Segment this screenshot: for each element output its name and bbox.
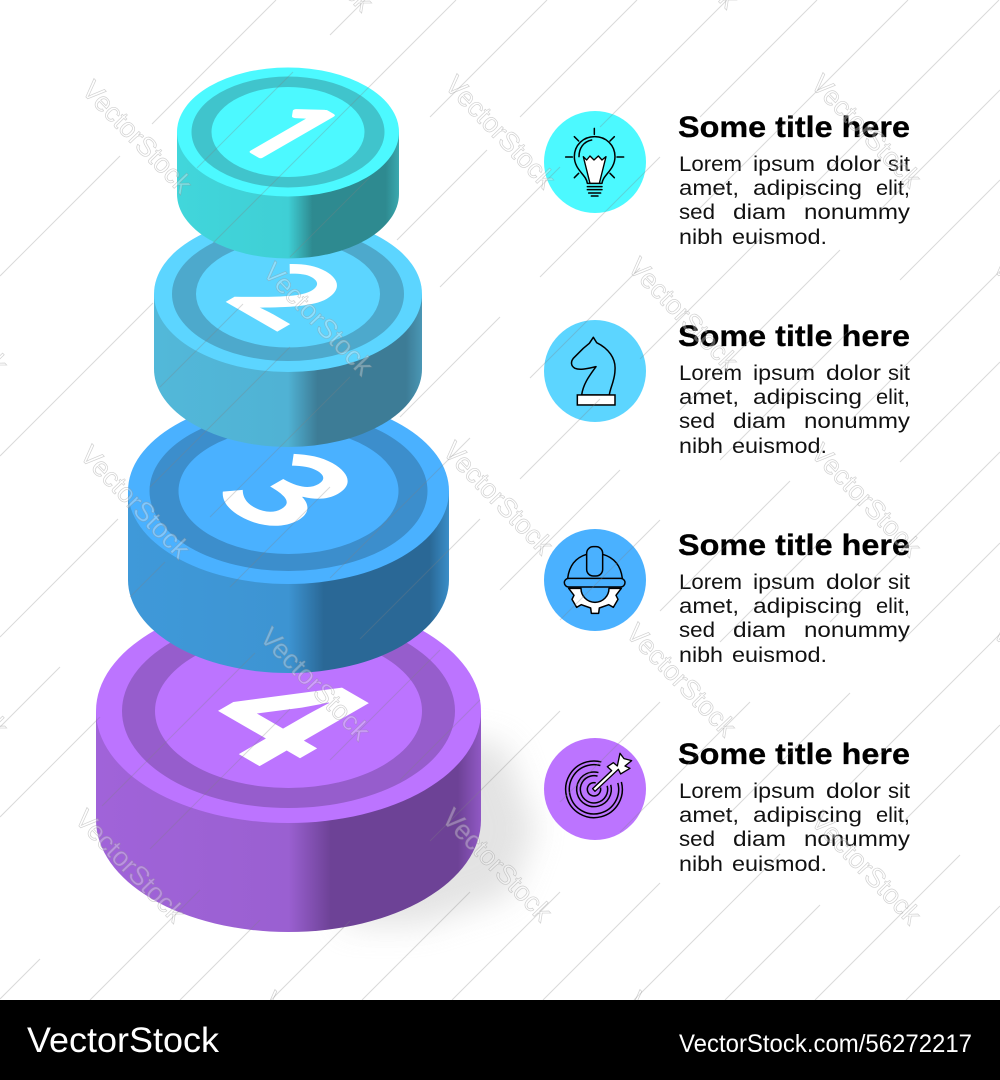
text block 3: nonummy xyxy=(804,619,911,642)
text block 1: diam xyxy=(733,201,786,224)
number 3: 3 xyxy=(173,414,424,558)
text block 4: nibh xyxy=(679,853,723,876)
text block 1: adipiscing xyxy=(753,177,862,200)
disc 3 blue xyxy=(128,398,449,673)
watermarks: VectorStock xyxy=(805,69,927,194)
text block 2: sit xyxy=(888,362,910,385)
watermarks: VectorStock xyxy=(69,804,191,929)
text block 4: euismod. xyxy=(732,853,827,876)
number 4: 4 xyxy=(144,624,452,802)
icon: target and arrow xyxy=(544,738,646,840)
text block 3: elit, xyxy=(876,595,910,618)
text block 4: dolor xyxy=(826,780,881,803)
text block 3: sed xyxy=(679,619,715,642)
text block 2 xyxy=(678,320,911,458)
watermarks: VectorStock xyxy=(805,806,927,931)
watermarks: VectorStock xyxy=(74,440,196,565)
text block 1 xyxy=(678,111,911,249)
drop shadow of stack xyxy=(340,735,535,925)
number 1: 1 xyxy=(209,90,364,179)
text block 2: elit, xyxy=(876,386,910,409)
text block 4: Lorem xyxy=(679,780,742,803)
text block 1: ipsum xyxy=(753,153,815,176)
heading 4: Some title here xyxy=(678,738,910,771)
text block 3: adipiscing xyxy=(753,595,862,618)
footer bar xyxy=(0,1000,1000,1080)
footer brand: VectorStock xyxy=(27,1020,219,1060)
watermarks: VectorStock xyxy=(622,252,744,377)
text block 2: euismod. xyxy=(732,435,827,458)
text block 1: elit, xyxy=(876,177,910,200)
text block 4: diam xyxy=(733,828,786,851)
text block 2: amet, xyxy=(679,386,739,409)
text block 2: adipiscing xyxy=(753,386,862,409)
text block 1: dolor xyxy=(826,153,881,176)
text block 4: sed xyxy=(679,828,715,851)
icon: chess knight xyxy=(544,320,646,422)
text block 3: nibh xyxy=(679,644,723,667)
text block 3: sit xyxy=(888,571,910,594)
text block 1: Lorem xyxy=(679,153,742,176)
watermarks: VectorStock xyxy=(620,618,742,743)
watermarks: VectorStock xyxy=(257,257,379,382)
text block 3 xyxy=(678,529,911,667)
text block 2: Lorem xyxy=(679,362,742,385)
icon: hard hat and gear xyxy=(544,529,646,631)
text block 1: euismod. xyxy=(732,226,827,249)
text block 2: nonummy xyxy=(804,410,911,433)
watermarks: VectorStock xyxy=(439,70,561,195)
text block 4 xyxy=(678,738,911,876)
disc 4 purple xyxy=(96,599,481,932)
footer url: VectorStock.com/56272217 xyxy=(679,1030,972,1058)
watermarks: VectorStock xyxy=(436,803,558,928)
text block 2: sed xyxy=(679,410,715,433)
disc 1 cyan xyxy=(177,68,399,258)
text block 2: dolor xyxy=(826,362,881,385)
heading 2: Some title here xyxy=(678,320,910,353)
heading 1: Some title here xyxy=(678,111,910,144)
text block 2: nibh xyxy=(679,435,723,458)
text block 1: sit xyxy=(888,153,910,176)
text block 4: nonummy xyxy=(804,828,911,851)
heading 3: Some title here xyxy=(678,529,910,562)
watermarks: VectorStock xyxy=(805,438,927,563)
watermarks: VectorStock xyxy=(254,622,376,747)
text block 4: amet, xyxy=(679,804,739,827)
text block 4: sit xyxy=(888,780,910,803)
text block 2: ipsum xyxy=(753,362,815,385)
text block 1: amet, xyxy=(679,177,739,200)
text block 3: Lorem xyxy=(679,571,742,594)
text block 1: nibh xyxy=(679,226,723,249)
disc 2 light blue xyxy=(154,216,422,447)
text block 3: amet, xyxy=(679,595,739,618)
text block 2: diam xyxy=(733,410,786,433)
text block 4: adipiscing xyxy=(753,804,862,827)
text block 3: dolor xyxy=(826,571,881,594)
text block 1: sed xyxy=(679,201,715,224)
text block 1: nonummy xyxy=(804,201,911,224)
text block 4: ipsum xyxy=(753,780,815,803)
watermarks: VectorStock xyxy=(76,75,198,200)
icon: light bulb xyxy=(544,111,646,213)
watermarks: VectorStock xyxy=(437,436,559,561)
text block 4: elit, xyxy=(876,804,910,827)
text block 3: ipsum xyxy=(753,571,815,594)
text block 3: diam xyxy=(733,619,786,642)
text block 3: euismod. xyxy=(732,644,827,667)
number 2: 2 xyxy=(191,230,403,352)
